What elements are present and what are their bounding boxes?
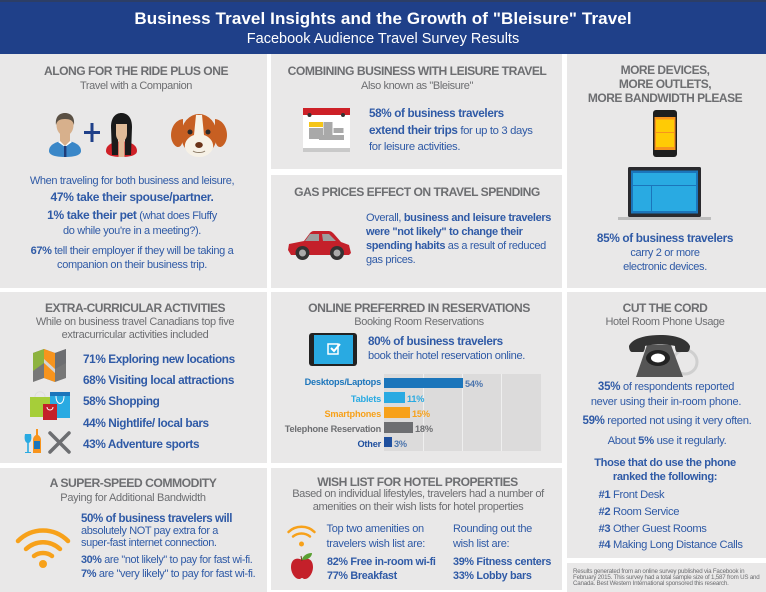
row: telephone — [284, 422, 433, 434]
subheading: amenities on their wish lists for hotel properties — [313, 501, 523, 513]
text: 85% — [597, 231, 733, 273]
text: 50%: super-fast internet connection. — [81, 537, 217, 549]
text: pet — [47, 208, 218, 237]
heading: CUT THE CORD — [623, 301, 707, 315]
text: 50% — [81, 513, 232, 549]
list: phone ranking: #1 Front Desk — [598, 489, 664, 501]
text: 80% — [368, 335, 525, 362]
subheading: Travel with a Companion — [80, 80, 192, 92]
row: telephone: 18% — [415, 424, 433, 434]
list: top two: 77% Breakfast — [327, 570, 397, 582]
text: 35%: 35% of respondents reported — [598, 381, 734, 393]
text: gas: Overall, business and leisure travelers — [366, 212, 551, 224]
icon: shopping bags — [30, 392, 70, 420]
row: tablets — [350, 392, 424, 404]
text: employer — [31, 245, 234, 271]
text: 7%: 7% are "very likely" to pay for fast wi-fi. — [81, 568, 255, 580]
footnote text — [573, 569, 760, 587]
icon: car — [288, 231, 351, 260]
subheading: Also known as "Bleisure" — [361, 80, 473, 92]
heading: MORE DEVICES, — [621, 63, 709, 77]
row: desktops: 54% — [465, 378, 483, 388]
list: activities: 43% Adventure sports — [83, 437, 199, 451]
text: 58% — [369, 107, 533, 153]
text: 85%: electronic devices. — [623, 261, 707, 273]
icon: plus — [84, 123, 100, 142]
list: rounding out: 39% Fitness centers — [453, 556, 551, 568]
list: top two: 82% Free in-room wi-fi — [327, 556, 436, 568]
heading: ALONG FOR THE RIDE PLUS ONE — [44, 64, 228, 78]
text: pet: do while you're in a meeting?). — [63, 225, 201, 237]
footnote text: Results generated from an online survey published via Facebook in — [573, 568, 744, 575]
text: rounding out — [453, 523, 532, 550]
subheading: Paying for Additional Bandwidth — [60, 492, 206, 504]
panel: extra-curricular activities — [0, 292, 267, 463]
text: ranked — [594, 456, 736, 484]
subheading — [292, 488, 544, 513]
list: activities: 68% Visiting local attractions — [83, 373, 234, 387]
row: desktops — [305, 377, 483, 388]
text: leisure: When traveling for both business and leisure, — [30, 175, 234, 187]
heading: MORE OUTLETS, — [619, 77, 711, 91]
row: telephone: Telephone Reservation — [285, 424, 381, 434]
subheading: Based on individual lifestyles, travelers had a number of — [292, 488, 544, 500]
row: other: Other — [357, 438, 381, 448]
list: rounding out — [453, 556, 551, 582]
list: phone ranking — [598, 487, 743, 554]
icon: dog — [171, 114, 227, 157]
text: 58%: 58% of business travelers — [369, 107, 504, 120]
heading: GAS PRICES EFFECT ON TRAVEL SPENDING — [294, 185, 540, 199]
panel: super-speed commodity — [0, 468, 267, 592]
subheading — [36, 316, 234, 341]
text: rounding out: Rounding out the — [453, 523, 532, 535]
text: gas: gas prices. — [366, 254, 415, 266]
heading — [588, 63, 742, 105]
text: 35% — [591, 380, 741, 409]
list: activities: 58% Shopping — [83, 394, 159, 408]
list: phone ranking: #2 Room Service — [598, 506, 679, 518]
panel: cut the cord — [567, 292, 766, 558]
subtitle: Facebook Audience Travel Survey Results — [247, 31, 519, 47]
icon: smartphone — [653, 110, 677, 157]
icon: apple — [291, 553, 313, 579]
list: rounding out: 33% Lobby bars — [453, 570, 532, 582]
list: top two — [327, 556, 436, 582]
row: desktops: Desktops/Laptops — [305, 377, 381, 387]
text: 85%: 85% of business travelers — [597, 231, 733, 245]
text: top two amenities — [326, 523, 425, 550]
subheading: extracurricular activities included — [62, 329, 208, 341]
bar chart — [284, 374, 541, 451]
row: tablets: 11% — [407, 394, 424, 404]
panel: along for the ride — [0, 54, 267, 288]
panel: footnote — [567, 563, 766, 592]
text: top two amenities: Top two amenities on — [326, 523, 424, 535]
panel: gas prices — [271, 175, 562, 288]
panel: online reservations — [271, 292, 562, 463]
text: top two amenities: travelers wish list are: — [326, 538, 425, 550]
title: Business Travel Insights and the Growth of "Bleisure" Travel — [134, 9, 632, 28]
text: 50%: 50% of business travelers will — [81, 513, 232, 525]
row: smartphones: 15% — [412, 408, 430, 418]
row: smartphones — [324, 407, 430, 419]
heading: EXTRA-CURRICULAR ACTIVITIES — [45, 301, 225, 315]
text: 47%: 47% take their spouse/partner. — [51, 190, 213, 204]
text: gas — [366, 212, 551, 266]
panel: more devices — [567, 54, 766, 288]
text: pet: 1% take their pet (what does Fluffy — [47, 208, 217, 222]
chart plot area — [384, 374, 541, 451]
icon: man — [49, 113, 81, 157]
text: ranked: Those that do use the phone — [594, 457, 736, 469]
list: phone ranking: #3 Other Guest Rooms — [598, 523, 707, 535]
subheading: Booking Room Reservations — [354, 316, 484, 328]
heading: A SUPER-SPEED COMMODITY — [50, 476, 216, 490]
header banner — [0, 0, 766, 54]
list: activities: 71% Exploring new locations — [83, 352, 235, 366]
list: phone ranking: #4 Making Long Distance Calls — [598, 539, 743, 551]
text: employer: companion on their business trip. — [57, 259, 207, 271]
text: 58%: for leisure activities. — [369, 141, 460, 153]
icon: laptop — [618, 167, 711, 220]
list: activities: 44% Nightlife/ local bars — [83, 416, 209, 430]
heading: MORE BANDWIDTH PLEASE — [588, 91, 742, 105]
icon: wifi — [16, 528, 70, 568]
text: 80%: 80% of business travelers — [368, 335, 503, 348]
subheading: While on business travel Canadians top five — [36, 316, 234, 328]
panel: combining business with leisure — [271, 54, 562, 169]
icon: calendar — [303, 108, 350, 152]
text: 35%: never using their in-room phone. — [591, 396, 741, 408]
row: tablets: Tablets — [351, 394, 381, 404]
text: 30%: 30% are "not likely" to pay for fast wi-fi. — [81, 554, 252, 566]
text: 58%: extend their trips for up to 3 days — [369, 124, 533, 136]
text: 50%: absolutely NOT pay extra for a — [81, 525, 218, 537]
list: activities — [83, 352, 235, 451]
text: 59%: 59% reported not using it very often. — [583, 415, 751, 427]
icon: wifi — [287, 526, 316, 546]
footnote text: Canada. Best Western International sponsored this research. — [573, 580, 729, 587]
row: other: 3% — [394, 438, 407, 448]
panel: wish list — [271, 468, 562, 590]
heading: COMBINING BUSINESS WITH LEISURE TRAVEL — [288, 64, 546, 78]
subheading: Hotel Room Phone Usage — [606, 316, 724, 328]
text: 5%: About 5% use it regularly. — [608, 435, 726, 447]
icon: fork and knife — [48, 431, 71, 454]
row: smartphones: Smartphones — [324, 408, 381, 418]
text: gas: spending habits as a result of reduced — [366, 240, 546, 252]
heading: WISH LIST FOR HOTEL PROPERTIES — [317, 475, 518, 489]
icon: tablet — [309, 333, 357, 366]
icon: woman — [106, 113, 137, 157]
icon: telephone — [629, 335, 702, 377]
text: ranked: ranked the following: — [613, 471, 717, 483]
icon: map — [33, 349, 66, 382]
text: 85%: carry 2 or more — [630, 247, 700, 259]
footnote text: February 2015. This survey had a total sample size of 1,587 from US and — [573, 574, 760, 581]
icon: wine and bottle — [24, 429, 41, 453]
row: other — [357, 437, 407, 448]
text: 80%: book their hotel reservation online. — [368, 350, 525, 362]
heading: ONLINE PREFERRED IN RESERVATIONS — [308, 301, 530, 315]
text: rounding out: wish list are: — [453, 538, 509, 550]
text: gas: were "not likely" to change their — [366, 226, 523, 238]
text: employer: 67% tell their employer if they will be taking a — [31, 245, 233, 257]
